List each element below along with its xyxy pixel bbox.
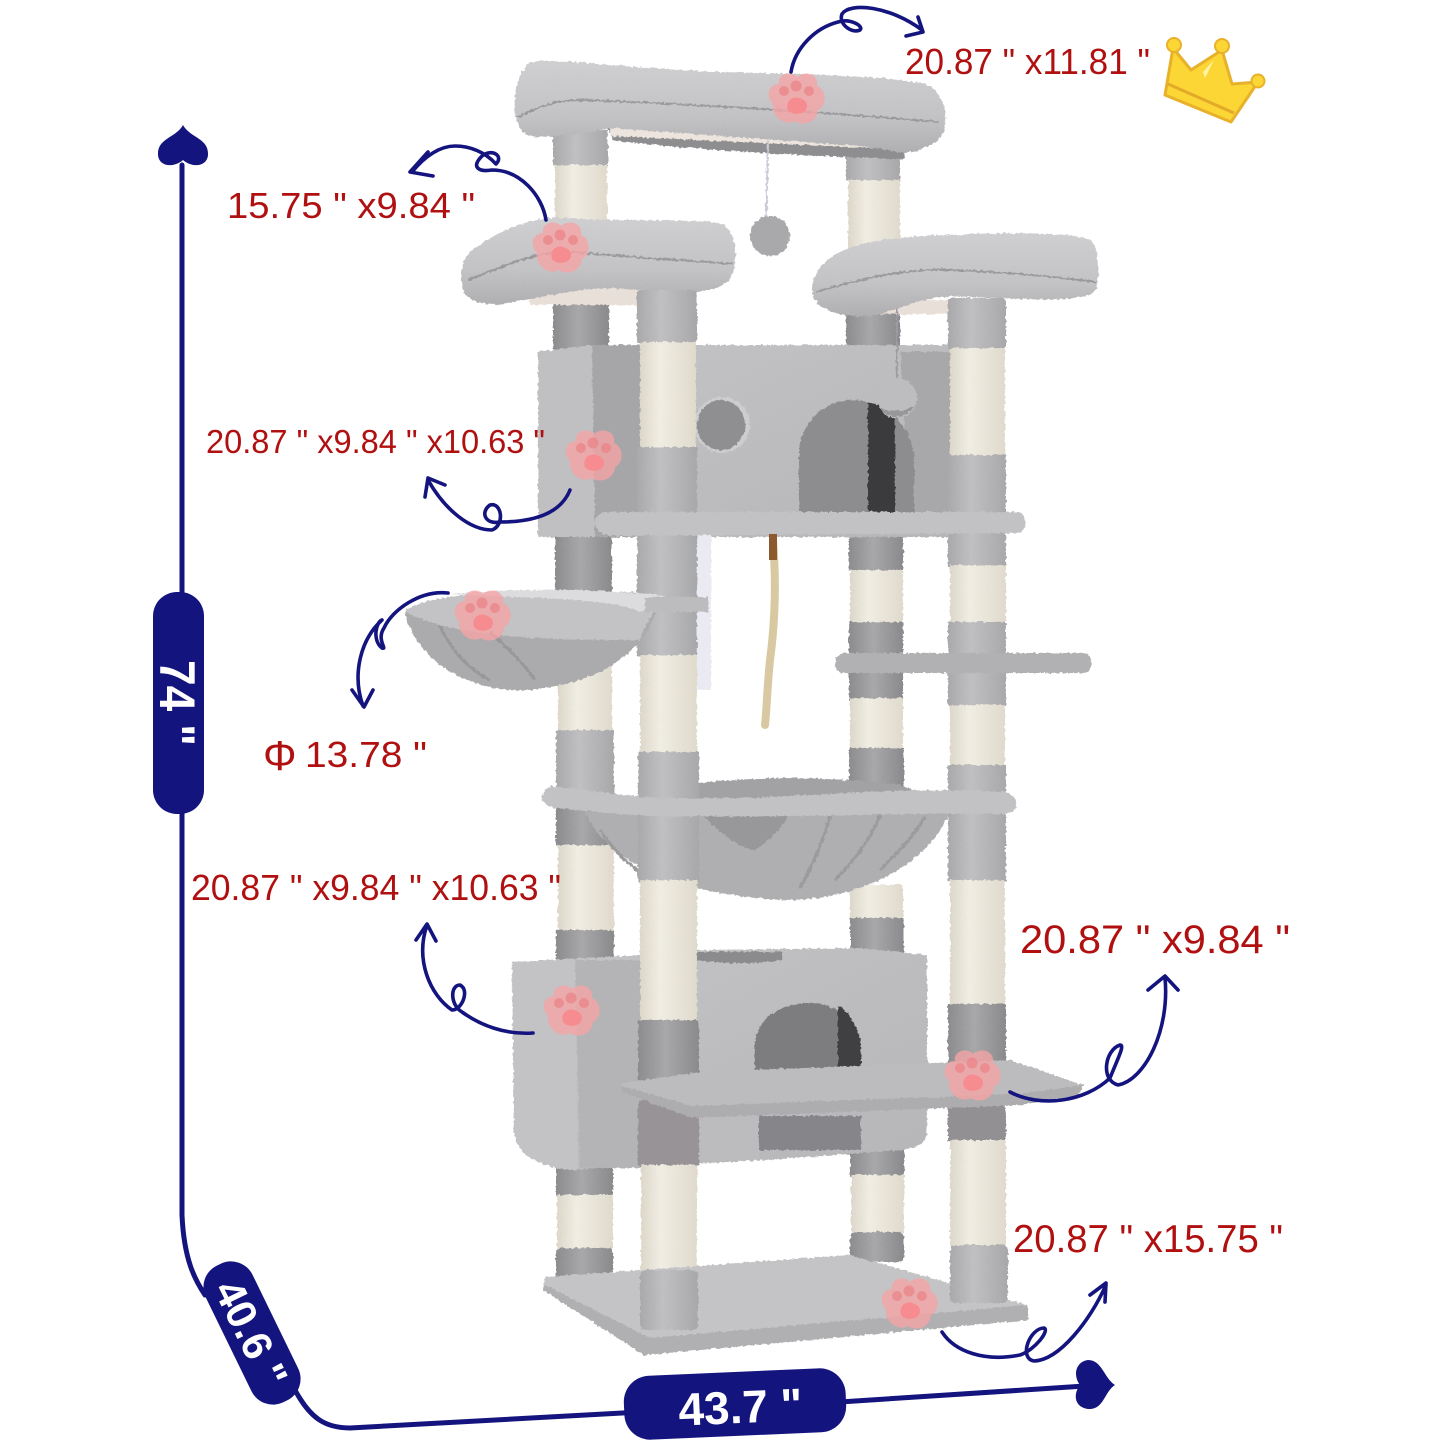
arrow: basket perch [352,593,448,707]
icon: crown [1165,38,1264,122]
base post stumps [640,1245,1008,1330]
back right post [846,145,904,1262]
height pill: 74: 74 " [149,660,205,746]
sisal rope [765,534,775,725]
right perch pompom toy [877,308,917,418]
back left post [553,130,614,1284]
dimension axis [158,125,1115,1428]
step plate [622,1060,1083,1118]
label: basket diameter: 13.78 " [305,734,427,775]
depth pill: 40.6: 40.6 " [205,1272,297,1395]
label: lower condo size: 20.87 " x9.84 " x10.63 " [191,867,561,908]
upper condo box [538,345,950,537]
arched door [755,1003,861,1072]
label: basket diameter: Φ [263,732,297,779]
round window [694,397,750,453]
hanging toy: top pompom [750,140,790,256]
heart arrowhead: right [1076,1360,1115,1409]
label: upper condo size: 20.87 " x9.84 " x10.63 " [206,423,545,460]
base board [543,1255,1028,1355]
label: step plate size: 20.87 " x9.84 " [1020,918,1290,962]
paw markers [455,73,1001,1328]
large hammock rim [542,786,1016,816]
arrow: left perch [410,146,546,220]
arrow: step plate [1010,976,1178,1101]
right perch [812,233,1098,316]
front right post [948,298,1006,1246]
arrow: lower condo [416,924,533,1033]
heart arrowhead: top [158,125,208,165]
arrow: upper condo [425,478,570,530]
cat tree [405,61,1098,1355]
label: left perch size: 15.75 " x9.84 " [227,185,475,226]
large hammock body [585,778,950,900]
top perch [515,61,946,159]
lower condo box [512,948,927,1170]
white tag behind post [695,535,711,690]
height pill: 74 [149,592,205,814]
label: base size: 20.87 " x15.75 " [1013,1218,1283,1261]
width pill: 43.7 [623,1367,847,1441]
arrow: base [942,1283,1106,1361]
arched door [799,400,914,512]
upper shelf [595,512,1026,536]
front left post [637,290,699,1272]
label: top perch size: 20.87 " x11.81 " [905,41,1150,82]
width pill: 43.7: 43.7 " [677,1378,804,1436]
post wrap band [645,597,708,612]
depth pill: 40.6 [195,1253,309,1413]
arrow: top perch [791,7,923,72]
top hole [697,952,782,963]
left basket perch [405,590,708,690]
label: basket diameter [263,732,427,779]
lower opening [759,1116,861,1150]
small side shelf [835,653,1092,673]
left perch [461,218,736,305]
